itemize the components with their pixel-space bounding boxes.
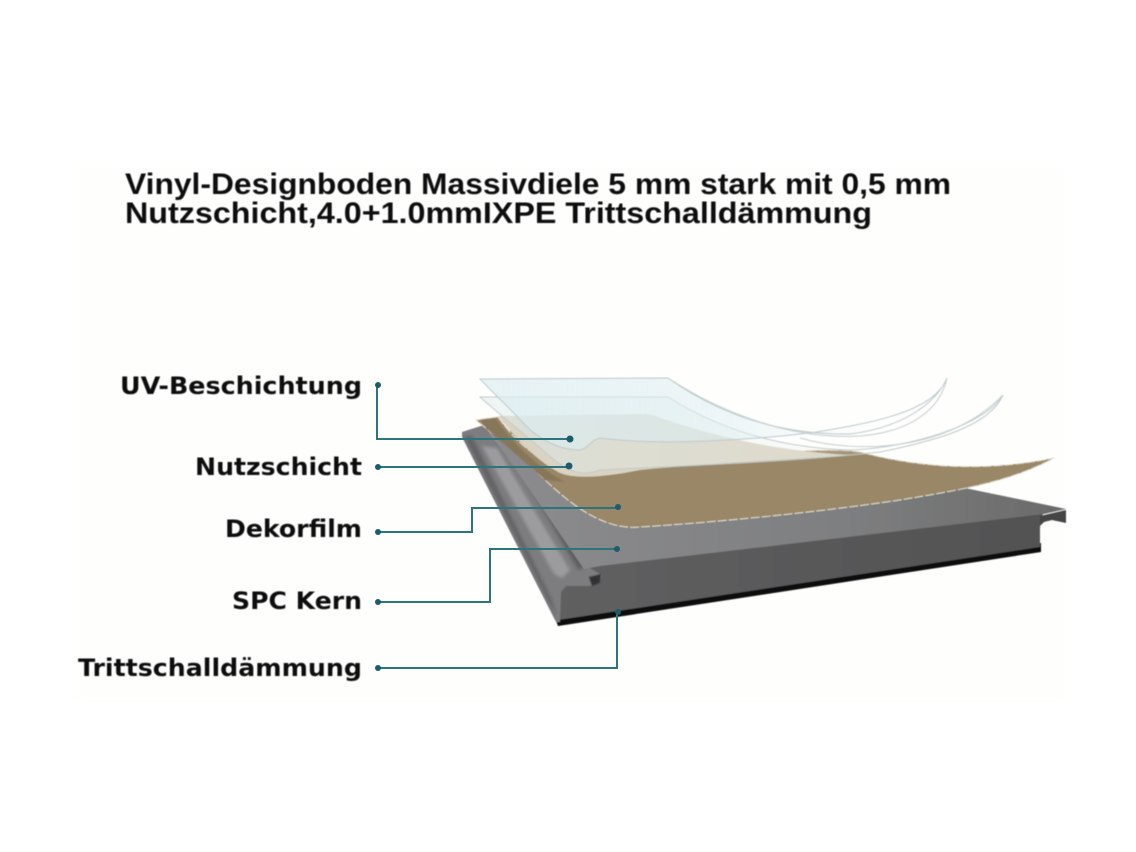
connector: Dekorfilm	[377, 508, 619, 532]
layer: SPC core top surface	[484, 424, 1066, 569]
lower film sweep line	[800, 395, 1003, 447]
connector dots	[375, 382, 621, 671]
notch	[589, 574, 601, 586]
tongue groove shadow	[508, 450, 587, 570]
layer: Nutzschicht beige film	[498, 414, 850, 477]
connector: Nutzschicht	[377, 466, 570, 468]
labels: Trittschalldämmung	[78, 654, 362, 682]
layer: Dekorfilm	[476, 417, 1054, 527]
labels: Dekorfilm	[225, 515, 362, 543]
background panel	[72, 165, 1067, 705]
layer: lower clear film	[480, 395, 1003, 473]
layer: SPC core tongue edge	[462, 425, 602, 622]
layer: upper clear film	[480, 378, 947, 450]
layer: SPC core right groove	[1040, 510, 1066, 526]
layer: SPC core front face	[558, 512, 1044, 620]
title: Vinyl-Designboden Massivdiele 5 mm stark mit 0,5 mm	[125, 168, 951, 201]
labels	[78, 372, 362, 682]
connector: SPC Kern	[377, 549, 618, 602]
labels: Nutzschicht	[195, 453, 362, 481]
labels: SPC Kern	[232, 587, 362, 615]
connector: Trittschalldämmung	[377, 612, 617, 668]
labels: UV-Beschichtung	[120, 372, 362, 400]
tongue outer shadow	[464, 436, 557, 618]
title	[125, 168, 951, 230]
layered floor plank illustration	[462, 378, 1066, 626]
connector lines	[377, 385, 619, 668]
tongue ridge highlight	[482, 446, 570, 578]
connector: UV-Beschichtung	[377, 385, 570, 439]
tan film shaded left edge	[480, 418, 565, 482]
upper film sweep line	[668, 378, 947, 436]
title: Nutzschicht,4.0+1.0mmIXPE Trittschalldämmung	[125, 197, 872, 230]
layer: Trittschalldämmung underlay	[553, 543, 1041, 626]
